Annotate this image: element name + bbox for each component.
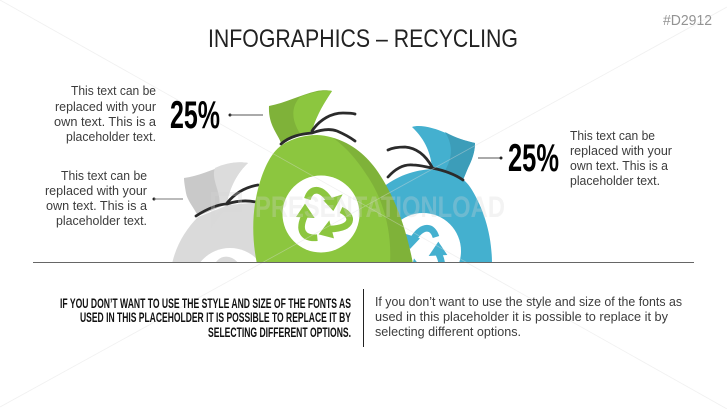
product code: #D2912 <box>663 12 712 29</box>
bold caption: SELECTING DIFFERENT OPTIONS. <box>208 324 351 340</box>
bold caption <box>60 295 351 340</box>
body caption: If you don’t want to use the style and size of the fonts as <box>375 294 682 309</box>
title: INFOGRAPHICS – RECYCLING <box>208 25 518 53</box>
baseline <box>33 262 694 264</box>
text block: top left: This text can be <box>71 83 156 98</box>
text block: middle left: placeholder text. <box>56 213 147 228</box>
text block: middle left: This text can be <box>61 168 147 183</box>
connector: gray bag <box>152 198 183 200</box>
connector: blue bag <box>478 156 502 160</box>
bold caption: IF YOU DON’T WANT TO USE THE STYLE AND SIZE OF THE FONTS AS <box>60 295 351 311</box>
text block: right: This text can be <box>570 128 655 143</box>
watermark: PRESENTATIONLOAD <box>255 191 505 224</box>
body caption: used in this placeholder it is possible to replace it by <box>375 309 669 324</box>
text block: middle left <box>45 168 148 228</box>
icon: blue bag <box>386 126 492 262</box>
text block: right: replaced with your <box>570 143 673 158</box>
text block: right: own text. This is a <box>570 158 669 173</box>
text block: right <box>570 128 673 188</box>
text block: top left: own text. This is a <box>54 114 157 129</box>
connector: green bag <box>228 114 263 116</box>
bold caption: USED IN THIS PLACEHOLDER IT IS POSSIBLE TO REPLACE IT BY <box>80 309 351 325</box>
percentage: blue bag: 25% <box>508 137 559 180</box>
icon: blue recycling symbol <box>406 224 448 262</box>
recycling bags illustration <box>172 90 492 262</box>
body caption <box>375 294 682 339</box>
text block: right: placeholder text. <box>570 173 660 188</box>
text block: top left <box>54 83 157 144</box>
icon: green bag <box>253 90 413 264</box>
divider <box>362 289 364 347</box>
text block: top left: placeholder text. <box>66 129 156 144</box>
icon: gray bag <box>172 162 260 262</box>
text block: middle left: own text. This is a <box>46 198 148 213</box>
icon: green recycling symbol <box>296 190 350 238</box>
percentage: green bag: 25% <box>170 94 220 137</box>
text block: top left: replaced with your <box>55 99 157 114</box>
body caption: selecting different options. <box>375 324 521 339</box>
text block: middle left: replaced with your <box>45 183 148 198</box>
